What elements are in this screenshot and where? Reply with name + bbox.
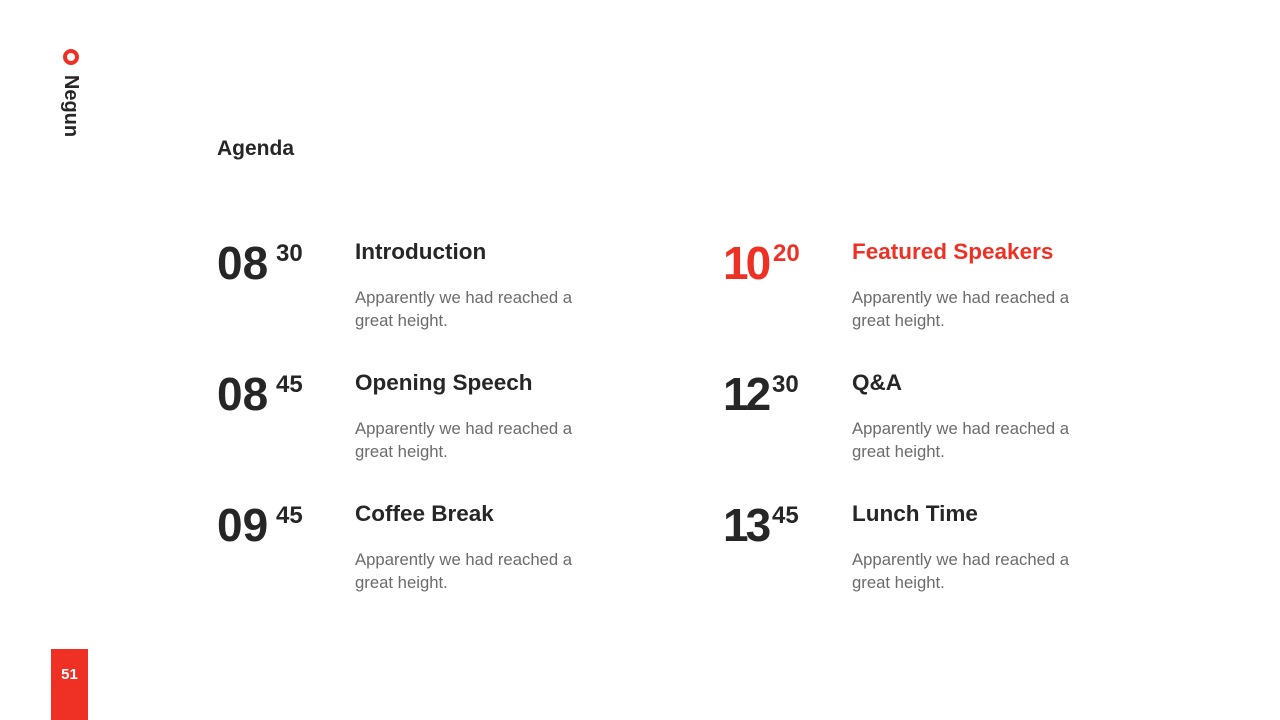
page number: [51, 649, 88, 720]
item: 08:30 Introduction: Apparently we had reached a great height.: [355, 288, 572, 330]
item: 08:30 Introduction: [217, 237, 572, 330]
item: 13:45 Lunch Time: 45: [772, 502, 799, 529]
item: 08:30 Introduction: 08: [217, 237, 268, 289]
item: 12:30 Q&A: 12: [723, 368, 768, 420]
logo text: Negun: [60, 75, 82, 137]
icon: logo ring: [63, 49, 79, 65]
item: 09:45 Coffee Break: [217, 499, 572, 592]
item: 08:45 Opening Speech: Opening Speech: [355, 370, 533, 395]
item: 08:45 Opening Speech: Apparently we had reached a great height.: [355, 419, 572, 461]
item: 09:45 Coffee Break: 45: [276, 502, 303, 529]
item: 13:45 Lunch Time: Lunch Time: [852, 501, 978, 526]
item: 09:45 Coffee Break: Coffee Break: [355, 501, 494, 526]
item: 08:30 Introduction: Introduction: [355, 239, 486, 264]
item: 12:30 Q&A: Apparently we had reached a great height.: [852, 419, 1069, 461]
item: 12:30 Q&A: Q&A: [852, 370, 902, 395]
item: 10:20 Featured Speakers: Apparently we had reached a great height.: [852, 288, 1069, 330]
item: 08:30 Introduction: 30: [276, 240, 303, 267]
page number: 51: [61, 666, 78, 683]
item: 08:45 Opening Speech: 08: [217, 368, 268, 420]
item: 10:20 Featured Speakers: [723, 237, 1070, 330]
item: 12:30 Q&A: [723, 368, 1070, 461]
item: 08:45 Opening Speech: 45: [276, 371, 303, 398]
item: 13:45 Lunch Time: 13: [723, 499, 768, 551]
item: 13:45 Lunch Time: Apparently we had reached a great height.: [852, 550, 1069, 592]
item: 08:45 Opening Speech: [217, 368, 572, 461]
title: Agenda: [217, 137, 294, 160]
item: 10:20 Featured Speakers: 10: [723, 237, 768, 289]
item: 10:20 Featured Speakers: 20: [773, 240, 800, 267]
logo: [60, 49, 82, 137]
item: 10:20 Featured Speakers: Featured Speakers: [852, 239, 1053, 264]
item: 12:30 Q&A: 30: [772, 371, 799, 398]
item: 13:45 Lunch Time: [723, 499, 1070, 592]
item: 09:45 Coffee Break: Apparently we had reached a great height.: [355, 550, 572, 592]
item: 09:45 Coffee Break: 09: [217, 499, 268, 551]
